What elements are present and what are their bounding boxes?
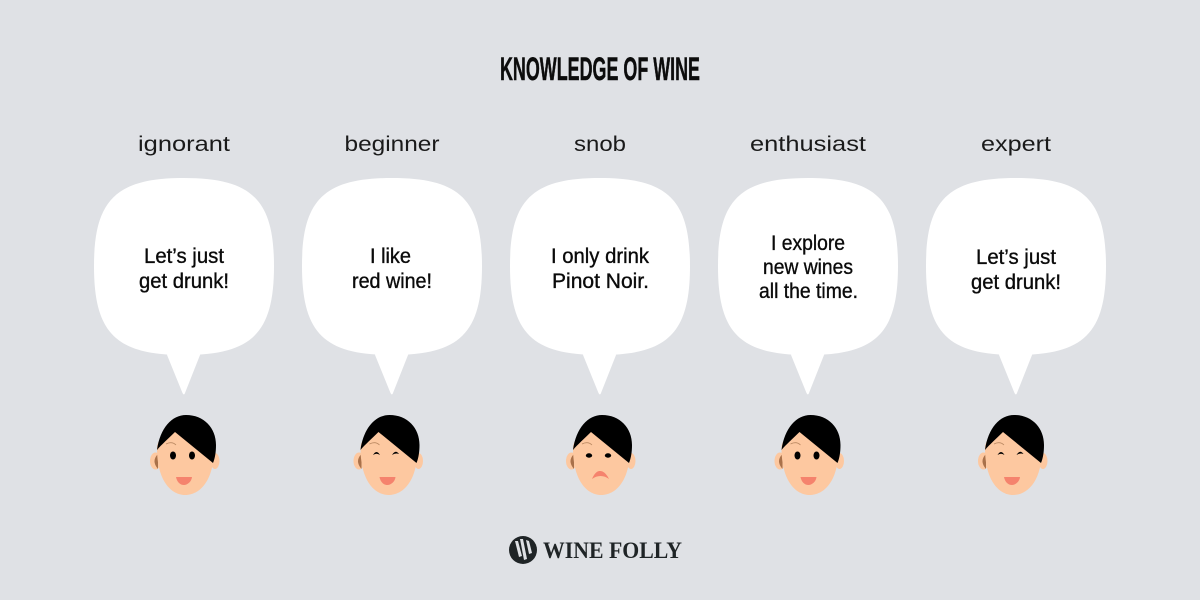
title: KNOWLEDGE OF WINE <box>500 51 700 87</box>
face: beginner, happy closed eyes <box>354 415 423 495</box>
label: beginner: beginner <box>344 133 440 156</box>
quote: expert: get drunk! <box>971 271 1061 294</box>
label: expert: expert <box>981 133 1051 156</box>
wordmark: WINE FOLLY <box>543 538 682 563</box>
quote: snob <box>551 245 649 293</box>
quote: expert <box>971 246 1061 294</box>
face: ignorant, smiling <box>150 415 220 495</box>
quote: enthusiast: new wines <box>763 256 853 279</box>
quote: snob: I only drink <box>551 245 649 268</box>
face: enthusiast, smiling <box>774 415 844 495</box>
icon: Wine Folly bottles roundel <box>509 536 537 564</box>
face: expert, happy closed eyes <box>978 415 1048 495</box>
panel: snob <box>510 133 690 495</box>
panel: expert <box>926 133 1106 495</box>
panel: ignorant <box>94 133 274 495</box>
panel: enthusiast <box>718 133 898 495</box>
panel: beginner <box>302 133 482 495</box>
label: snob: snob <box>574 133 626 156</box>
logo: Wine Folly <box>509 536 682 564</box>
quote: enthusiast <box>759 232 858 303</box>
quote: beginner: red wine! <box>352 270 432 293</box>
quote: ignorant: Let’s just <box>144 245 224 268</box>
speech bubble: expert <box>926 178 1106 394</box>
speech bubble: beginner <box>302 178 482 394</box>
quote: enthusiast: I explore <box>771 232 845 255</box>
speech bubble: ignorant <box>94 178 274 394</box>
quote: snob: Pinot Noir. <box>552 270 649 293</box>
quote: ignorant: get drunk! <box>139 270 229 293</box>
quote: enthusiast: all the time. <box>759 280 858 303</box>
speech bubble: enthusiast <box>718 178 898 394</box>
face: snob, frowning <box>566 415 636 495</box>
quote: beginner <box>352 245 432 293</box>
quote: expert: Let’s just <box>976 246 1056 269</box>
quote: ignorant <box>139 245 229 293</box>
label: enthusiast: enthusiast <box>750 133 866 156</box>
quote: beginner: I like <box>370 245 411 268</box>
speech bubble: snob <box>510 178 690 394</box>
label: ignorant: ignorant <box>138 133 230 156</box>
